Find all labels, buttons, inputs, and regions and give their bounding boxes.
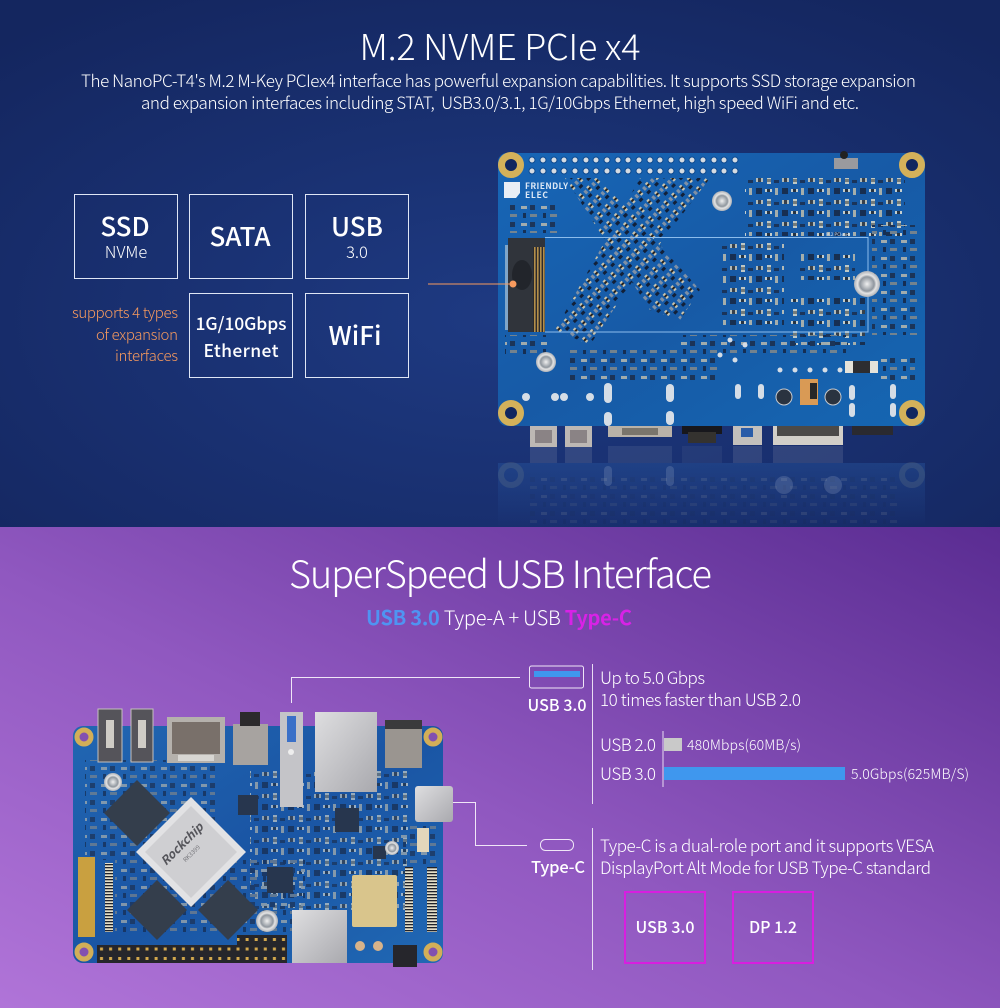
box: USB 3.0 mode: USB 3.0 [636, 914, 694, 938]
bar chart: USB speed comparison: 480Mbps(60MB/s) [687, 735, 801, 755]
logo: FriendlyElec: ELEC [525, 189, 548, 201]
box: SSD NVMe: SSD [100, 207, 150, 244]
USB 3.0 description: Up to 5.0 Gbps [600, 664, 705, 689]
HDMI port [167, 717, 225, 763]
GPIO header [97, 935, 287, 963]
subtitle: USB 3.0 Type-A + USB Type-C: USB 3.0 Type-A + USB Type-C [366, 602, 632, 631]
connectors on board edge [530, 426, 893, 447]
box: 1G/10Gbps Ethernet [190, 294, 292, 378]
40-pin GPIO holes [529, 157, 738, 174]
WiFi module [352, 875, 397, 927]
box: SSD NVMe: NVMe [105, 239, 147, 263]
Type-C description: Type-C is a dual-role port and it supports VESA [600, 832, 934, 857]
title: SuperSpeed USB Interface: SuperSpeed USB Interface [289, 544, 712, 599]
box: 1G/10Gbps Ethernet: Ethernet [204, 338, 279, 363]
processor: Rockchip RK3399: Rockchip [157, 818, 208, 869]
USB 3.0 port [280, 712, 303, 807]
USB 3.0 description: 10 times faster than USB 2.0 [600, 686, 801, 711]
note: supports 4 types of expansion interfaces: interfaces [115, 345, 178, 366]
box: WiFi [306, 294, 408, 378]
box: USB 3.0: USB [331, 207, 383, 244]
Type-C description [600, 832, 934, 879]
callout line to M.2 slot [428, 280, 516, 288]
connector line from USB 3.0 port [292, 678, 520, 703]
description paragraph: and expansion interfaces including STAT, USB3.0/3.1, 1G/10Gbps Ethernet, high speed WiFi and etc. [141, 89, 859, 114]
lower through-hole pads [522, 338, 896, 426]
USB Type-C port [415, 786, 453, 822]
Ethernet port [315, 712, 377, 792]
logo: FriendlyElec [504, 180, 568, 201]
label: M.2 PCIe x4: M.2 PCIe x4 [826, 232, 850, 238]
bar chart: USB speed comparison: USB 2.0 [600, 731, 656, 756]
switch [834, 151, 858, 169]
SD card slot [292, 910, 347, 963]
upper and lower component groups [505, 178, 920, 383]
note: supports 4 types of expansion interfaces: of expansion [96, 324, 178, 345]
USB 3.0 description [600, 664, 801, 711]
box: SSD NVMe [74, 194, 178, 278]
icon: USB 3.0 port [530, 666, 584, 688]
label: Type-C: Type-C [531, 854, 585, 878]
antenna connectors and button [355, 828, 429, 967]
box: USB 3.0 [306, 194, 408, 278]
USB 2.0 ports [98, 709, 153, 762]
bar chart: USB speed comparison: 5.0Gbps(625MB/S) [851, 764, 969, 784]
audio jack [233, 712, 268, 765]
diagonal components [555, 178, 710, 345]
component texture [85, 760, 436, 935]
box: SATA [190, 194, 292, 278]
box: SATA: SATA [209, 217, 271, 254]
DC jack [385, 720, 422, 768]
box: USB 3.0: 3.0 [346, 239, 368, 263]
label: USB 3.0: USB 3.0 [528, 692, 586, 716]
panel: SuperSpeed USB section [0, 527, 1000, 1008]
panel: M.2 NVMe section [0, 0, 1000, 527]
box: USB 3.0 mode [625, 892, 705, 963]
Type-C description: DisplayPort Alt Mode for USB Type-C standard [600, 854, 931, 879]
capacitors [776, 361, 878, 405]
FPC connectors [78, 857, 437, 937]
title: M.2 NVME PCIe x4: M.2 NVME PCIe x4 [360, 19, 640, 71]
note: supports 4 types of expansion interfaces: supports 4 types [72, 302, 178, 323]
RAM and flash chips [104, 780, 258, 940]
PCB bottom view [498, 151, 925, 426]
silver standoffs [536, 191, 880, 372]
box: DP 1.2 mode [733, 892, 813, 963]
small ICs [238, 795, 386, 893]
M.2 M-Key slot [505, 238, 545, 332]
bar chart: USB speed comparison: USB 3.0 [600, 760, 656, 785]
box: 1G/10Gbps Ethernet: 1G/10Gbps [196, 311, 286, 336]
box: DP 1.2 mode: DP 1.2 [749, 914, 797, 938]
divider: Type-C details [592, 828, 594, 970]
standoffs [104, 773, 399, 932]
icon: USB Type-C port [540, 840, 574, 850]
board reflection [498, 446, 925, 527]
gold mounting holes [77, 730, 440, 959]
divider: USB 3.0 details [592, 664, 594, 804]
description paragraph: The NanoPC-T4's M.2 M-Key PCIex4 interface has powerful expansion capabilities. It supports SSD storage expansion [81, 67, 916, 92]
note: supports 4 types of expansion interfaces [72, 302, 178, 366]
gold mounting holes [502, 156, 922, 422]
processor: Rockchip RK3399: RK3399 [181, 843, 202, 864]
silk outline of M.2 card [545, 238, 868, 332]
connector line from Type-C port [453, 802, 527, 846]
PCB top view [73, 709, 453, 967]
bar chart: USB speed comparison [600, 731, 969, 787]
processor: Rockchip RK3399 [136, 797, 246, 907]
logo: FriendlyElec: FRIENDLY [525, 180, 568, 192]
box: WiFi: WiFi [329, 316, 381, 353]
description paragraph [81, 67, 916, 114]
